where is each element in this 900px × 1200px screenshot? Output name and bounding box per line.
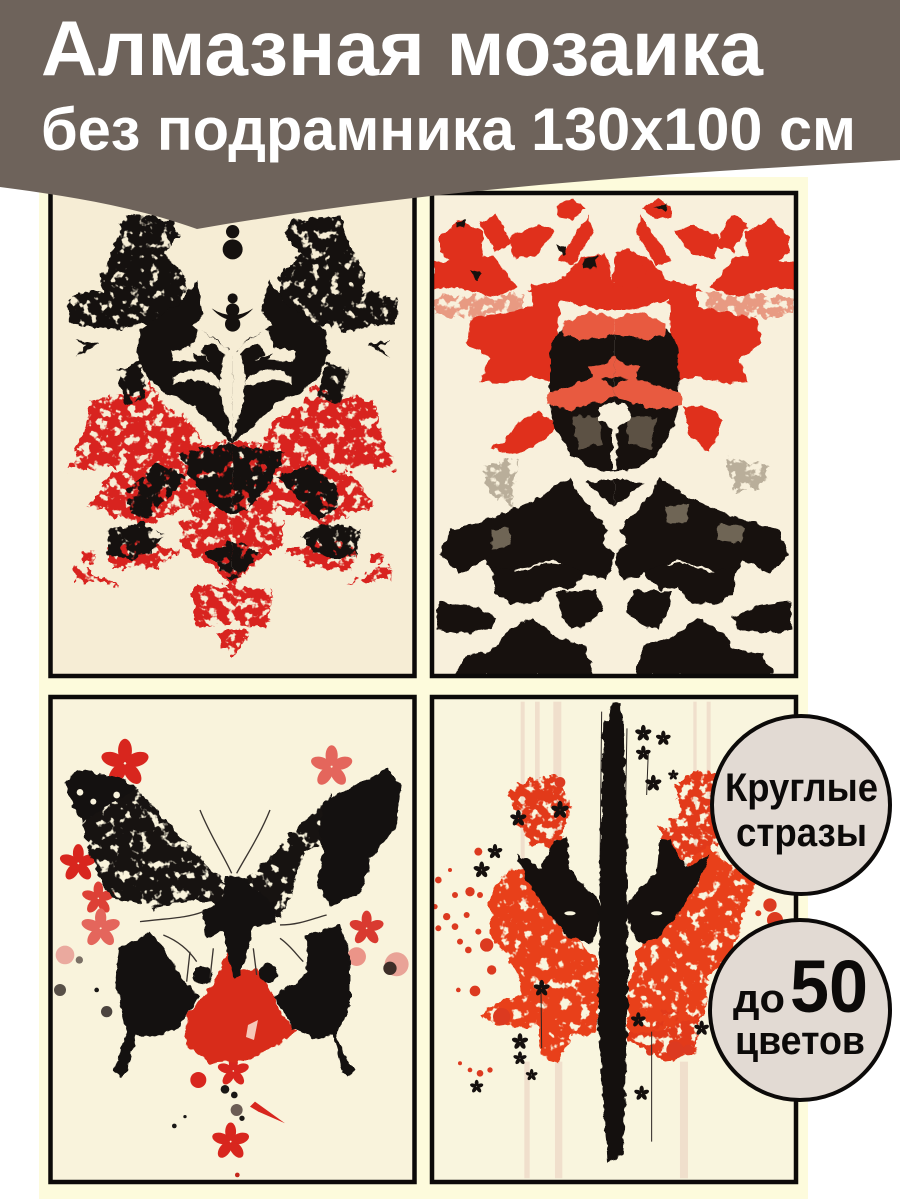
red flower shapes	[433, 198, 795, 455]
red splash	[480, 848, 755, 1063]
badge: round rhinestones: стразы	[736, 811, 867, 855]
black vertical brush stroke	[598, 702, 628, 1163]
panel: red and black silhouette of man in suit	[431, 192, 797, 678]
pale drip stripes	[521, 702, 711, 1178]
panel frames	[50, 192, 796, 1182]
grey spatter dots	[54, 789, 397, 1177]
head and suit details	[492, 312, 745, 550]
badge: up to 50 colours: 50	[790, 945, 868, 1028]
bamboo leaf clusters	[469, 725, 710, 1101]
black mask	[75, 280, 390, 443]
badge: up to 50 colours: до	[733, 977, 785, 1021]
artwork backing sheet	[39, 177, 808, 1199]
speckled red splash	[508, 768, 718, 1060]
badge: up to 50 colours: цветов	[735, 1019, 865, 1063]
centre drop motifs	[212, 225, 253, 332]
mask eyes	[564, 911, 662, 915]
title: Алмазная мозаика	[41, 4, 764, 92]
wing veins and antennae	[140, 810, 327, 982]
black head and suit	[437, 203, 792, 675]
side streaks and stems	[541, 712, 652, 1142]
panel: butterfly with red flowers	[54, 738, 409, 1178]
badge: up to 50 colours	[710, 920, 890, 1100]
red ink splashes	[68, 383, 397, 658]
red wash	[185, 947, 298, 1063]
pale red dust band	[435, 293, 794, 507]
header banner	[0, 0, 900, 229]
panel: black and red inkblot with mask	[50, 190, 415, 678]
white marks in red wash	[246, 1020, 258, 1040]
badge: round rhinestones	[712, 716, 890, 894]
black foliage	[68, 215, 397, 583]
flowers	[56, 739, 409, 1160]
black wings	[517, 837, 710, 943]
speckled black wing areas	[83, 785, 333, 925]
mask highlights	[170, 328, 295, 438]
panel: black vertical stroke with red splashes	[431, 697, 797, 1184]
badge: round rhinestones: Круглые	[725, 766, 878, 810]
scattered red droplets	[432, 777, 783, 1077]
subtitle: без подрамника 130х100 см	[41, 96, 856, 163]
solid black wings	[65, 769, 402, 1078]
